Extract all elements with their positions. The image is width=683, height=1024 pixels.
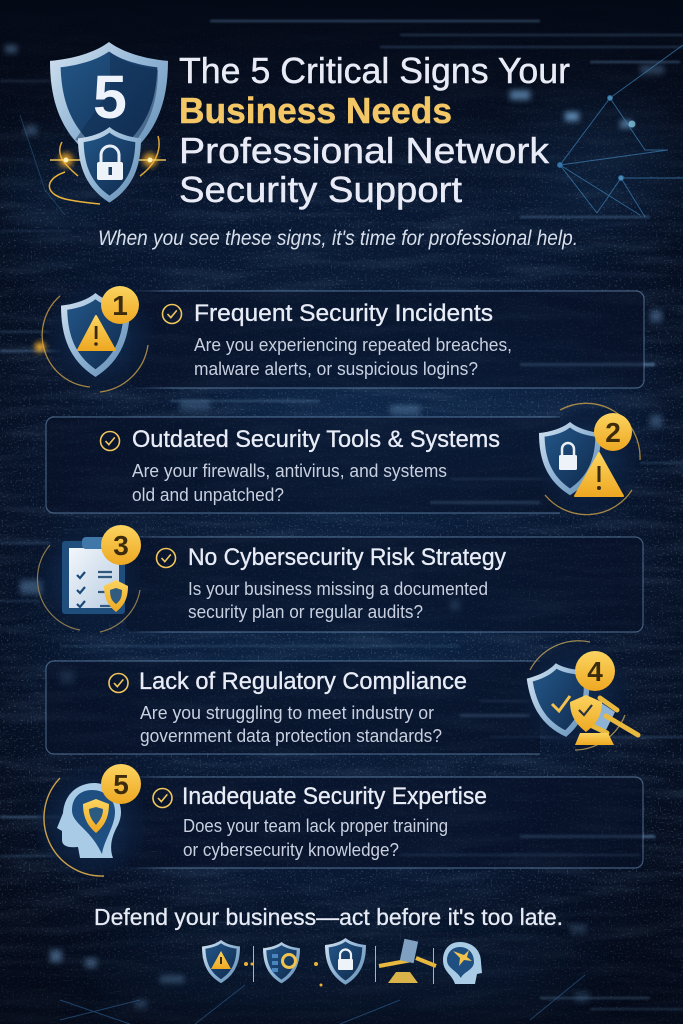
large shield [50,42,168,168]
lock [97,146,123,180]
panel: sign 4 [46,639,638,754]
card outline [130,291,644,388]
description: Are your firewalls, antivirus, and systems [132,460,447,481]
description: or cybersecurity knowledge? [183,839,399,860]
check icon [153,788,172,808]
card outline [46,661,540,754]
icon: clipboard with badge 3: 3 [113,530,129,561]
description: Are you struggling to meet industry or [140,702,434,723]
icon: shield with lock, warning and badge 2 [530,403,642,516]
header icon: shield with 5 and lock [49,42,168,204]
subtitle: When you see these signs, it's time for professional help. [98,227,578,250]
connector sparks [244,946,434,986]
title: Business Needs [179,90,452,131]
description: Are you experiencing repeated breaches, [194,334,512,355]
icon: head with shield and badge 5 [33,764,149,881]
description: government data protection standards? [140,725,442,746]
icon: clipboard with badge 3 [35,524,143,632]
shield facet [75,52,158,146]
icon: warning shield [202,940,240,983]
icon: gavel [379,939,436,983]
description: Is your business missing a documented [188,578,488,599]
panel: sign 3 [35,524,643,632]
closing call to action: Defend your business—act before it's too late. [94,904,563,930]
description: malware alerts, or suspicious logins? [194,358,478,379]
icon: shield with warning and badge 1: 1 [112,290,128,321]
check icon [100,432,120,450]
icon: shield with lock, warning and badge 2: 2 [605,417,621,448]
panel: sign 5 [33,764,643,881]
icon: shield with gavel and badge 4: 4 [587,656,603,687]
icon: network shield [263,942,300,983]
icon: head with shield and badge 5: 5 [113,769,129,800]
heading: Frequent Security Incidents [194,300,493,327]
title: Security Support [179,169,462,210]
panel: sign 2 [46,403,642,516]
check icon [109,674,128,692]
heading: No Cybersecurity Risk Strategy [188,544,507,571]
title: The 5 Critical Signs Your [179,50,570,91]
icon: shield with warning and badge 1 [35,281,156,393]
icon: shield with gavel and badge 4 [519,639,638,751]
card outline [125,777,643,868]
card outline [125,537,643,632]
icon: lock shield [325,938,366,985]
footer icon row [202,938,482,986]
description: Does your team lack proper training [183,815,448,836]
card outline [46,417,560,513]
check icon [162,304,182,324]
glowing orbit [49,136,166,204]
title: Professional Network [179,130,550,171]
small lock shield [78,127,141,203]
network lines bottom [60,975,585,1024]
numeral 5: 5 [93,63,127,131]
icon: head [443,942,482,984]
heading: Lack of Regulatory Compliance [139,668,467,695]
description: old and unpatched? [132,484,284,505]
heading: Outdated Security Tools & Systems [132,426,500,453]
network lines top right [20,45,683,217]
heading: Inadequate Security Expertise [182,783,487,810]
check icon [156,548,176,568]
description: security plan or regular audits? [188,601,423,622]
panel: sign 1 [35,281,644,393]
